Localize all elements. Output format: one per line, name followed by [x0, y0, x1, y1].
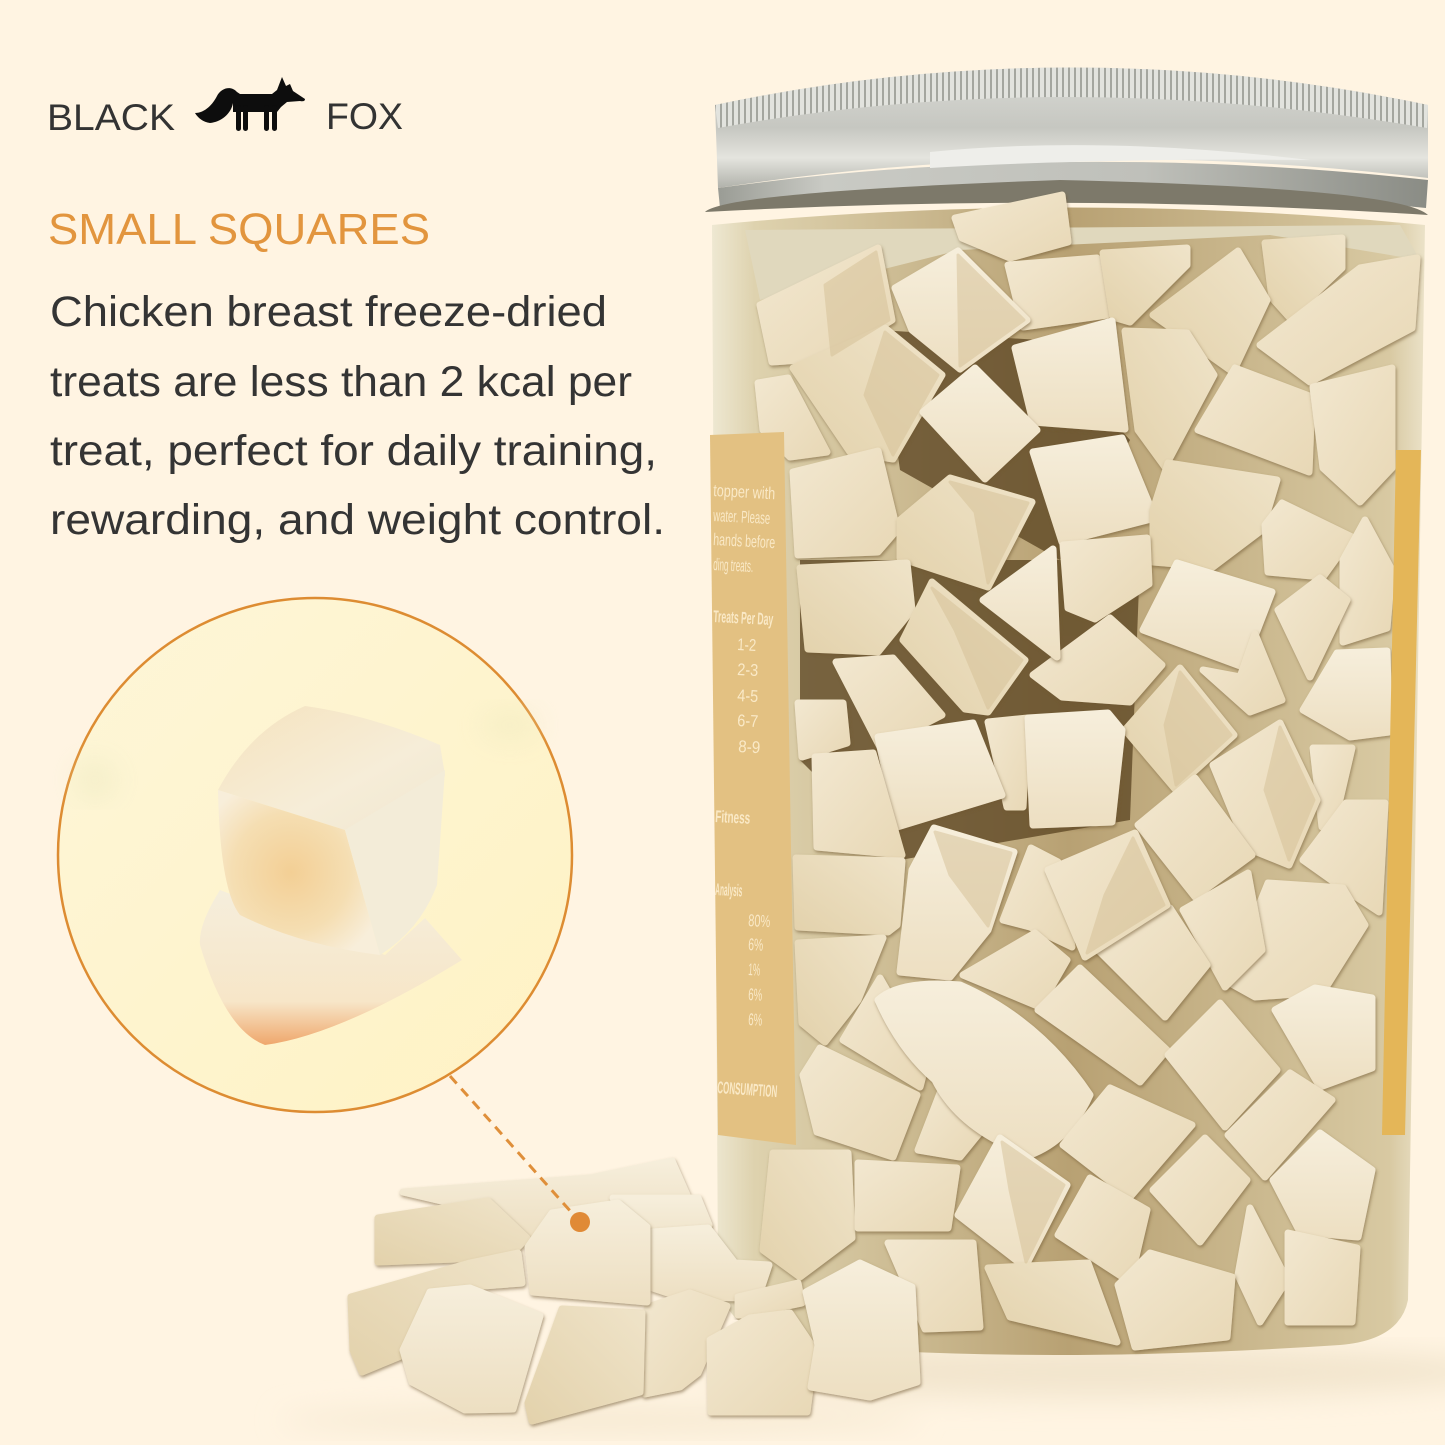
description text: treats are less than 2 kcal per	[50, 358, 632, 406]
treat side shading	[825, 252, 1314, 1262]
jar label left: water. Please	[712, 506, 771, 528]
jar label left: Treats Per Day	[713, 607, 774, 629]
jar label left: 6%	[748, 1010, 763, 1030]
jar label right	[1382, 450, 1421, 1135]
jar label left: CONSUMPTION	[717, 1078, 778, 1101]
sparse crumbs top glass	[745, 225, 1420, 300]
logo: Black Fox	[47, 77, 403, 138]
ground shadow	[280, 1346, 1445, 1432]
jar label left: Fitness	[715, 807, 751, 828]
jar label left: topper with	[713, 481, 776, 503]
jar label left: 2-3	[737, 660, 759, 680]
jar lid	[705, 68, 1428, 215]
jar label left: Analysis	[715, 880, 743, 900]
background blobs	[75, 709, 540, 800]
large treat bottom	[200, 890, 462, 1045]
jar	[705, 68, 1428, 1355]
jar label left: 1-2	[737, 635, 757, 655]
treats inside jar	[758, 195, 1417, 1347]
jar label left: 80%	[748, 911, 771, 931]
jar label left: 6%	[748, 985, 763, 1005]
dashed connector	[450, 1076, 580, 1222]
jar label left: 8-9	[738, 737, 761, 757]
description text: Chicken breast freeze-dried	[50, 288, 607, 336]
jar label left: 1%	[748, 960, 761, 980]
description text: treat, perfect for daily training,	[50, 427, 657, 475]
dark gaps between treats	[800, 330, 1140, 860]
jar label left: 6%	[748, 935, 764, 955]
jar label left: hands before	[713, 530, 776, 552]
jar label left: 4-5	[737, 686, 759, 706]
treat pile foreground	[351, 1161, 917, 1421]
description text	[50, 288, 665, 544]
anchor dot	[570, 1212, 590, 1232]
logo word FOX: FOX	[326, 96, 403, 137]
icon: fox	[195, 77, 305, 131]
jar label left	[710, 432, 796, 1145]
zoom circle	[58, 598, 572, 1112]
description text: rewarding, and weight control.	[50, 496, 665, 544]
heading: SMALL SQUARES	[48, 205, 430, 254]
jar label left: ding treats.	[713, 555, 754, 576]
jar label left: 6-7	[737, 711, 759, 731]
large treat top cube	[218, 706, 445, 955]
logo word BLACK: BLACK	[47, 97, 175, 138]
jar glass body	[712, 208, 1425, 1355]
